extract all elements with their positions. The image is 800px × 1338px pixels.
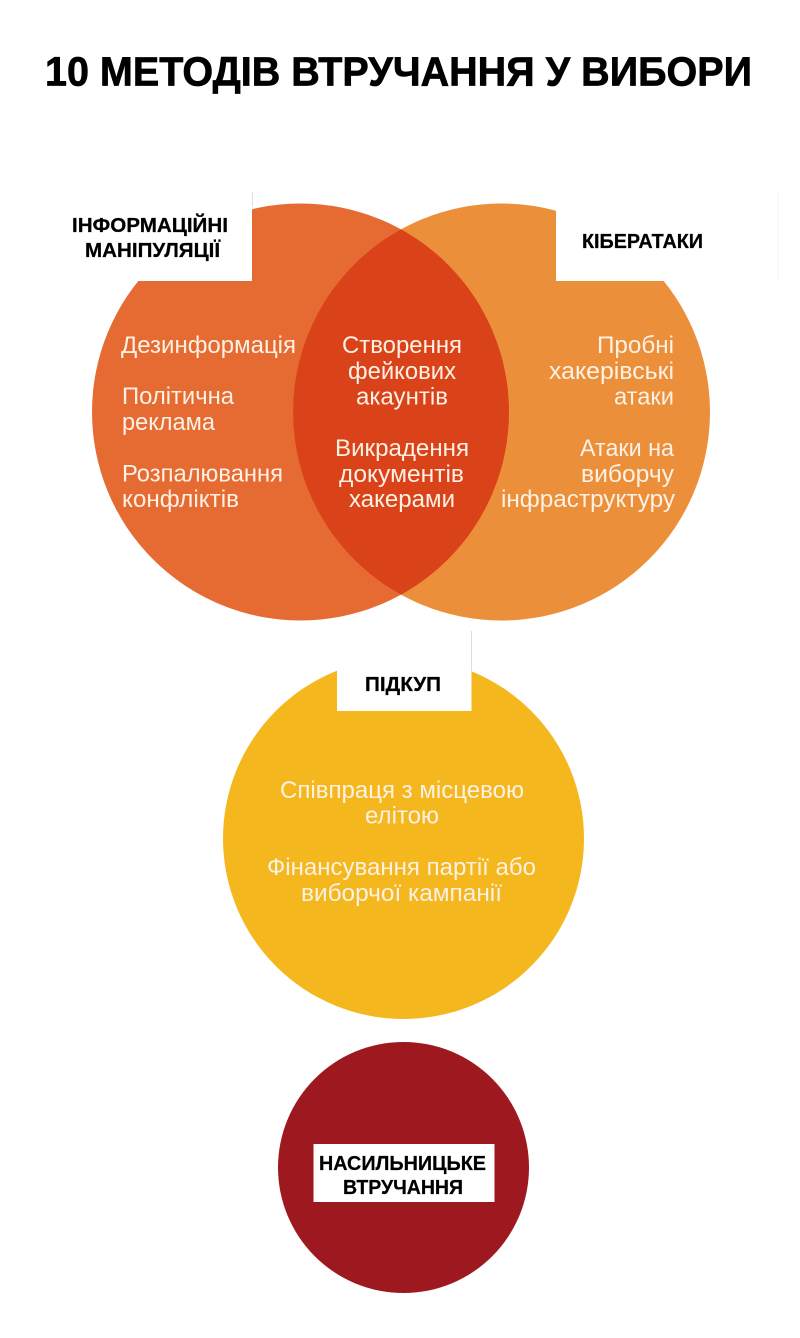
text block: bribery methods: елітою: [365, 802, 439, 830]
text block: cyberattack methods: Пробні: [597, 332, 674, 359]
heading: information manipulation: ІНФОРМАЦІЙНІ: [72, 213, 228, 237]
text block: cyberattack methods: хакерівські: [549, 358, 674, 385]
text block: information manipulation methods: Дезинформація: [121, 332, 296, 359]
heading: violent interference: ВТРУЧАННЯ: [343, 1177, 463, 1199]
text block: information manipulation methods: [121, 332, 296, 513]
title: 10 МЕТОДІВ ВТРУЧАННЯ У ВИБОРИ: [45, 48, 752, 94]
heading: information manipulation: [72, 213, 228, 262]
text block: overlap methods: документів: [339, 461, 464, 488]
label box: violent interference: [314, 1144, 494, 1202]
text block: bribery methods: [267, 777, 536, 907]
label box: information manipulation: [60, 192, 252, 281]
heading: cyberattacks: КІБЕРАТАКИ: [582, 231, 703, 253]
text block: cyberattack methods: інфраструктуру: [501, 486, 675, 513]
text block: cyberattack methods: Атаки на: [580, 435, 675, 462]
panel: information manipulation circle: [92, 204, 509, 620]
text block: overlap methods: Створення: [342, 332, 462, 359]
text block: overlap methods: фейкових: [348, 358, 456, 385]
text block: information manipulation methods: Розпалювання: [122, 460, 283, 488]
label box: bribery: [337, 631, 472, 711]
heading: information manipulation: МАНІПУЛЯЦІЇ: [85, 239, 220, 262]
text block: overlap methods: хакерами: [349, 486, 455, 513]
text block: bribery methods: виборчої кампанії: [301, 880, 502, 907]
text block: information manipulation methods: реклама: [122, 409, 216, 436]
panel: cyberattacks circle: [293, 204, 710, 620]
text block: overlap methods: [335, 332, 469, 513]
text block: bribery methods: Співпраця з місцевою: [280, 777, 524, 804]
panel: bribery circle: [223, 658, 584, 1019]
text block: overlap methods: акаунтів: [356, 384, 448, 410]
text block: cyberattack methods: [501, 332, 675, 513]
text block: information manipulation methods: Політична: [122, 383, 235, 410]
label box: cyberattacks: [556, 192, 778, 281]
panel: overlap of manipulation and cyberattacks: [293, 230, 509, 594]
heading: violent interference: [319, 1153, 486, 1199]
heading: bribery: ПІДКУП: [365, 674, 441, 696]
text block: cyberattack methods: виборчу: [581, 461, 674, 488]
panel: violent interference circle: [278, 1042, 529, 1293]
text block: cyberattack methods: атаки: [614, 384, 674, 410]
text block: information manipulation methods: конфліктів: [122, 486, 239, 513]
heading: violent interference: НАСИЛЬНИЦЬКЕ: [319, 1153, 486, 1175]
text block: overlap methods: Викрадення: [335, 435, 469, 462]
text block: bribery methods: Фінансування партії або: [267, 854, 536, 881]
